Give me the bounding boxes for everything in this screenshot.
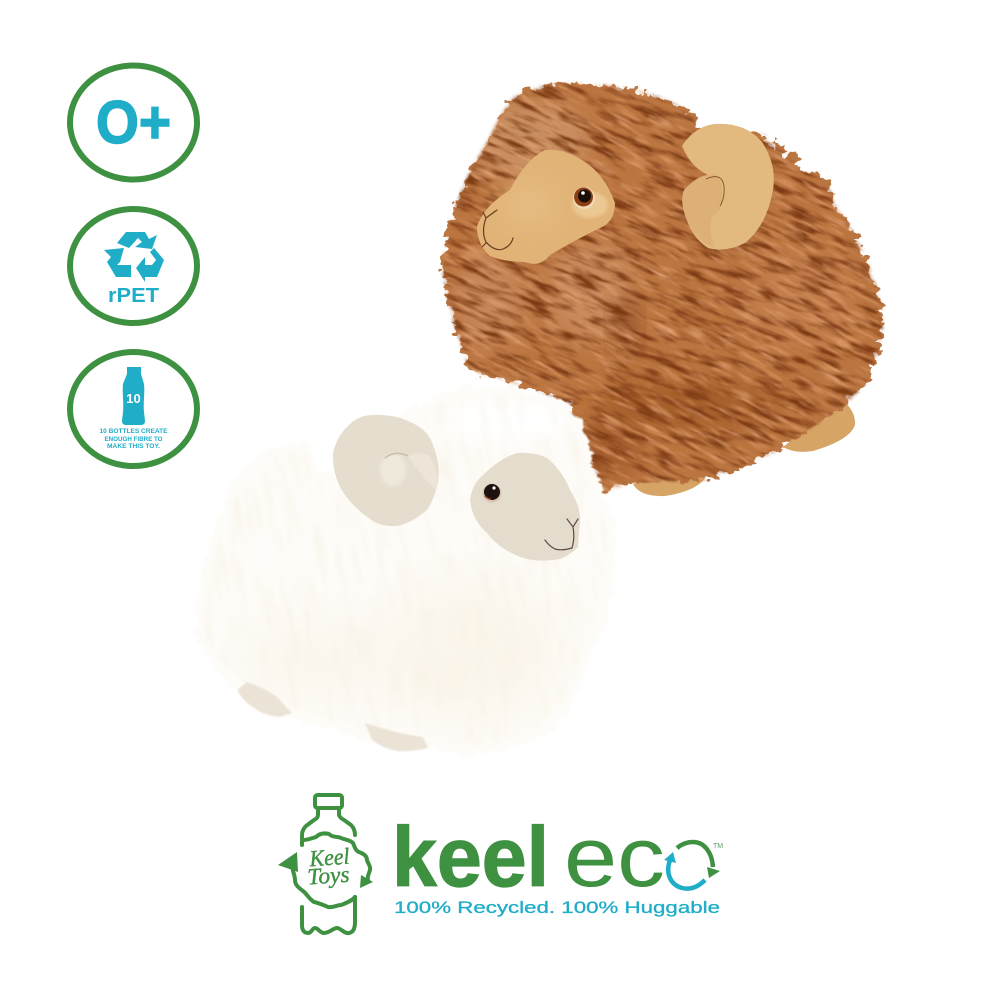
logo: Keel Toys wordmark: Toys [307,862,350,890]
logo: bottle outline [292,795,370,933]
keeleco logo [278,795,723,933]
white ram horn [333,415,439,526]
white fleece silhouette [196,387,615,755]
rPET badge: rPET [108,285,159,307]
rPET badge [70,209,197,323]
brown fleece silhouette [443,83,883,494]
brown ram feet [633,400,855,496]
ten bottles badge: 10 [126,391,141,406]
logo: ec wordmark: ec [564,810,665,904]
logo: Keel Toys wordmark [307,844,350,890]
ten bottles badge [70,352,197,466]
brown ram fleece [438,80,886,495]
logo: tagline: 100% Recycled. 100% Huggable [394,898,720,917]
age badge: 0+ [70,66,197,180]
brown ram plush toy [438,80,886,496]
logo: trademark: TM [713,843,723,850]
white ram plush toy [202,394,608,797]
white ram eye [482,484,502,502]
logo: bottle arrows [278,852,373,888]
infographic canvas [67,62,886,936]
age badge: 0+: O+ [96,89,171,156]
brown ram mouth [482,210,513,250]
brown ram horn [682,124,774,250]
white ram mouth [545,519,578,550]
white ram feet [237,682,428,751]
brown ram face [477,150,615,264]
bottle caption: ENOUGH FIBRE TO [104,437,163,443]
bottle caption: 10 BOTTLES CREATE [100,429,168,435]
logo: circular o arrows [664,842,720,889]
brown ram eye [573,187,595,209]
bottle caption [100,429,168,450]
icon: bottle [122,367,145,425]
logo: keel wordmark: keel [392,810,549,904]
logo: Keel Toys wordmark: Keel [308,844,350,871]
bottle caption: MAKE THIS TOY. [107,444,160,450]
white fleece shading [206,444,579,738]
white ram face [470,453,580,561]
brown fleece texture [440,80,886,495]
icon: recycling arrows [104,232,164,282]
